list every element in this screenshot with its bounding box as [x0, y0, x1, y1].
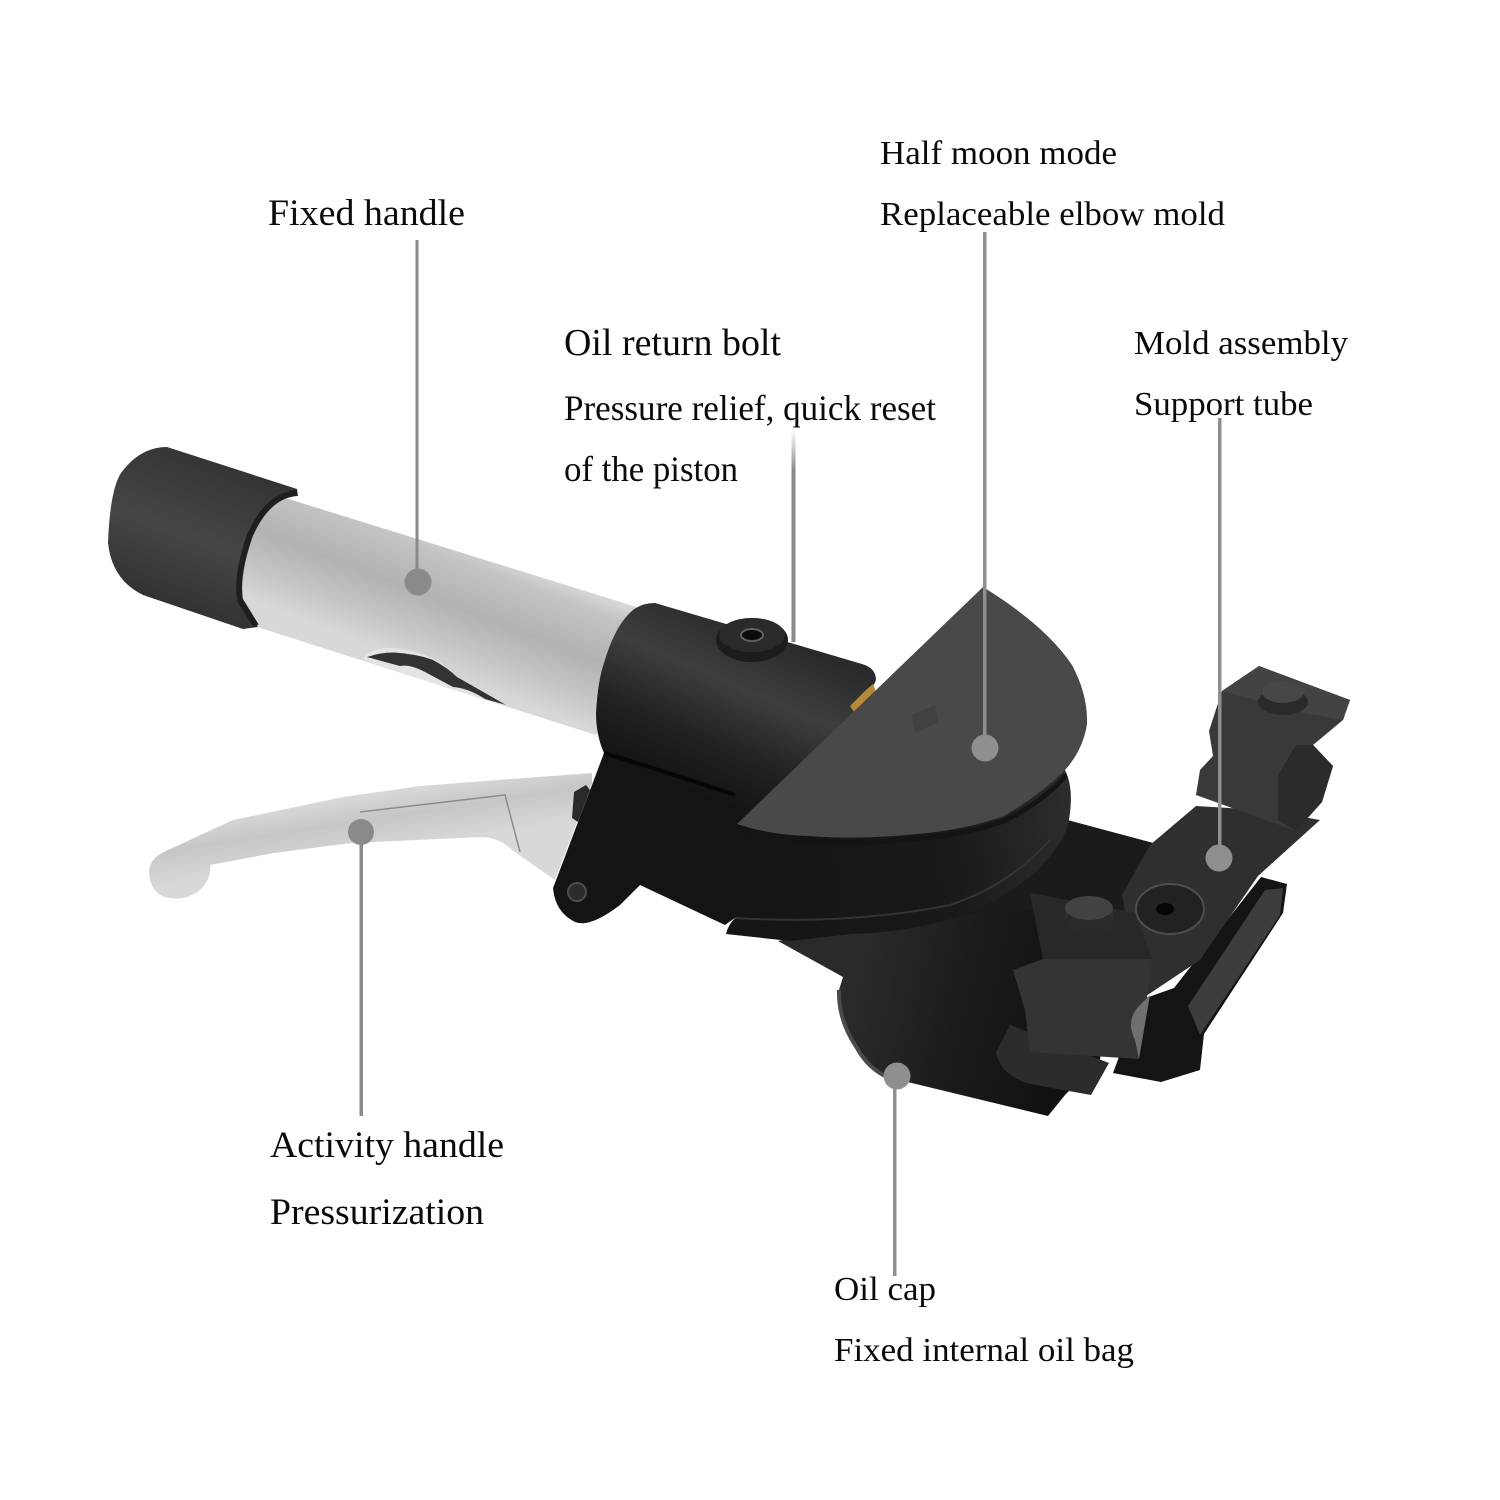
leader: fixed handle — [404, 240, 432, 596]
body pivot pin — [568, 883, 586, 901]
hex socket screw — [1136, 884, 1204, 934]
label: oil return bolt — [564, 322, 936, 489]
clamp plate face — [1188, 888, 1283, 1035]
half moon mold — [737, 587, 1087, 838]
label: oil return bolt: Oil return bolt — [564, 322, 781, 364]
label: activity handle: Activity handle — [270, 1125, 504, 1166]
washer under front block — [996, 1025, 1109, 1095]
lever pivot shadow — [572, 785, 590, 822]
mold marking — [912, 705, 938, 733]
reservoir lip — [839, 990, 887, 1077]
label: half moon mode: Half moon mode — [880, 135, 1117, 172]
label: fixed handle: Fixed handle — [268, 193, 465, 234]
base plate — [860, 818, 1200, 960]
elbow wheel and lower flange — [726, 770, 1071, 941]
brass fitting — [850, 684, 876, 712]
product: hydraulic pipe bender — [108, 447, 1350, 1116]
fixed handle aluminium tube — [235, 497, 640, 735]
label: oil cap: Fixed internal oil bag — [834, 1332, 1134, 1369]
leader: oil return bolt — [792, 430, 796, 642]
oil return bolt — [716, 618, 788, 662]
leader: half moon mold — [972, 232, 998, 762]
oil reservoir cap — [778, 910, 1110, 1116]
label: oil cap: Oil cap — [834, 1271, 936, 1308]
label: half moon mode — [880, 135, 1225, 233]
label: half moon mode: Replaceable elbow mold — [880, 196, 1225, 233]
label: mold assembly — [1134, 325, 1348, 423]
leader: oil cap — [884, 1062, 910, 1276]
flange highlight — [735, 840, 1050, 920]
label: oil return bolt: Pressure relief, quick reset — [564, 388, 936, 428]
cap inner ring — [239, 493, 297, 626]
clamp plate lower right — [1113, 877, 1287, 1082]
label: activity handle: Pressurization — [270, 1192, 484, 1233]
activity handle lever — [149, 773, 592, 898]
rubber end cap — [108, 447, 298, 629]
sleeve groove — [604, 753, 735, 795]
label: activity handle — [270, 1125, 504, 1233]
handle sticker — [364, 648, 510, 708]
half moon lower edge — [736, 775, 1066, 842]
main body and sleeve — [553, 603, 876, 925]
front clamp block — [1013, 893, 1152, 1059]
rear clamp block — [1196, 666, 1350, 831]
label: mold assembly: Support tube — [1134, 386, 1313, 423]
label: mold assembly: Mold assembly — [1134, 325, 1348, 362]
label: oil return bolt: of the piston — [564, 449, 738, 489]
lever rib detail — [360, 795, 520, 852]
leader: activity handle — [348, 819, 374, 1116]
mold assembly support tube — [1122, 806, 1320, 1000]
label: oil cap — [834, 1271, 1134, 1369]
leader: mold assembly — [1206, 418, 1232, 872]
